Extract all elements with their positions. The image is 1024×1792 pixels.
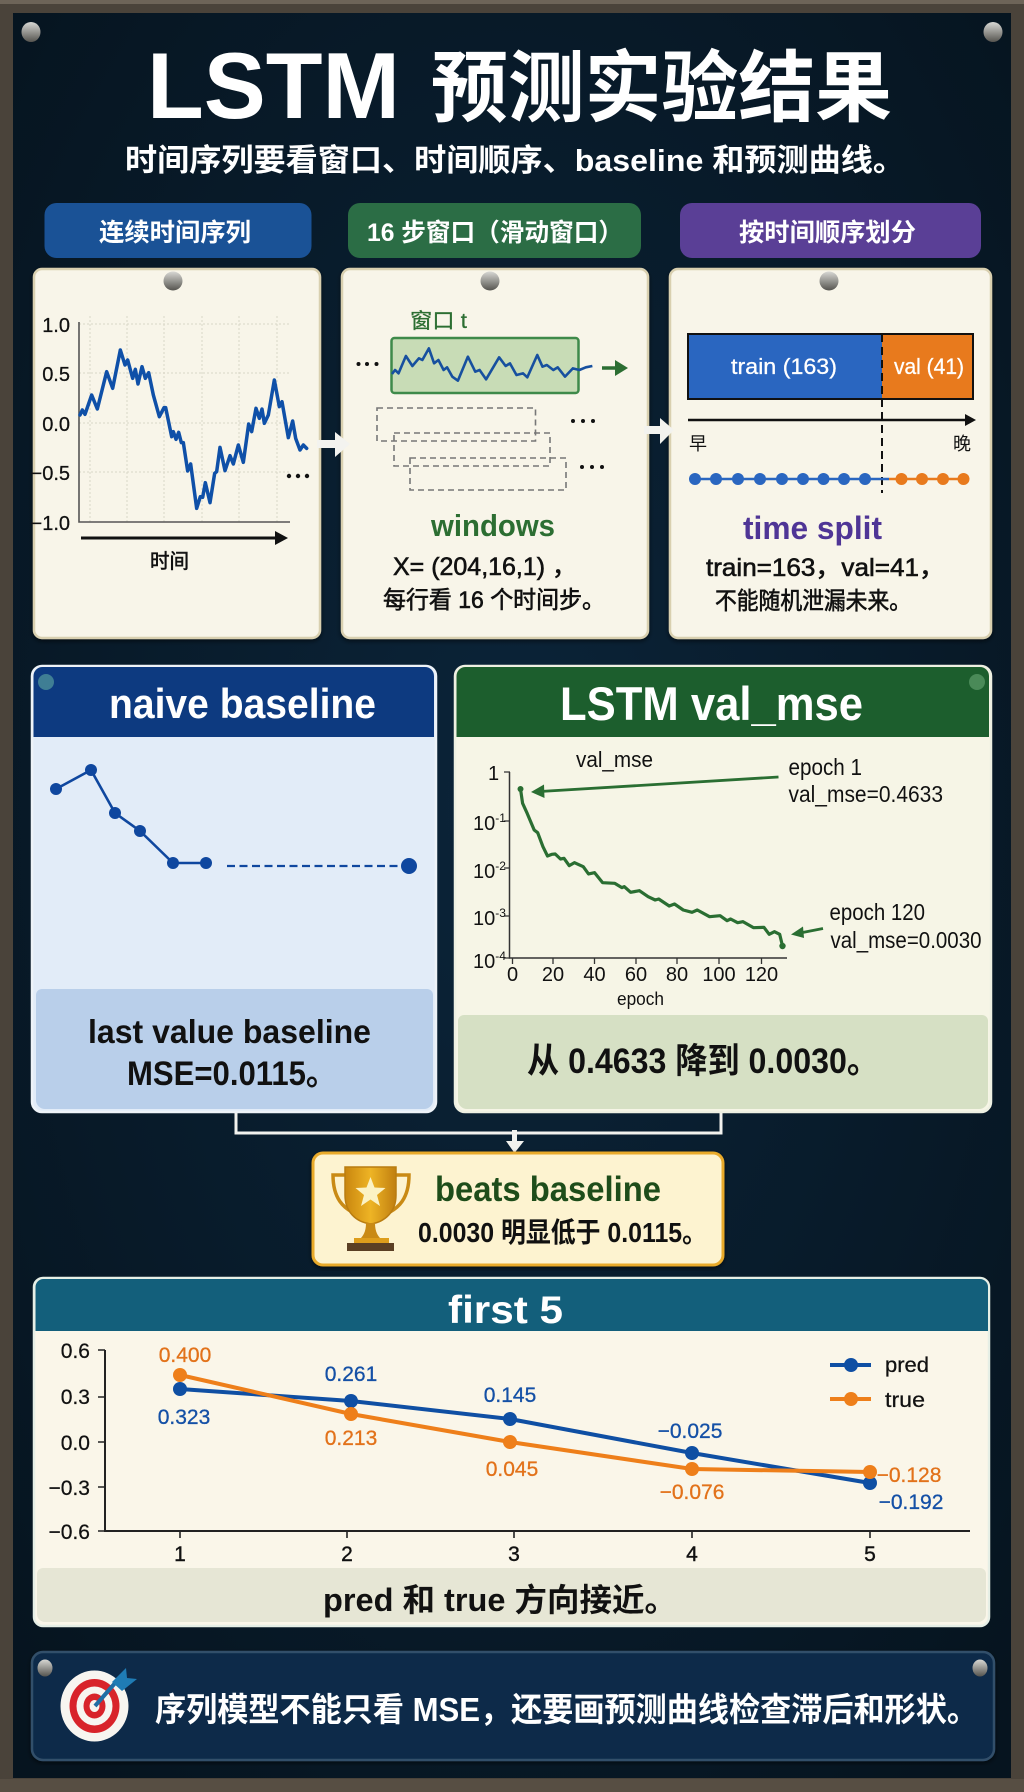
icon: card pin (480, 272, 500, 290)
split bar: train and val: train (163) (731, 354, 837, 379)
subtitle: 时间序列要看窗口、时间顺序、baseline 和预测曲线。 (125, 143, 905, 178)
diagram: last value line (50, 764, 417, 874)
arrow: series to windows (317, 432, 350, 457)
value labels: pred: −0.192 (879, 1491, 943, 1514)
panel: naive baseline (32, 666, 436, 1112)
line chart: time series: 1.0 (42, 315, 70, 337)
line chart: pred vs true: −0.6 (49, 1521, 90, 1544)
arrow: epoch 120 callout (791, 926, 823, 938)
log-scale chart (473, 747, 982, 1009)
title (147, 33, 892, 138)
time axis early to late: 早 (689, 434, 707, 454)
badge: beats baseline (313, 1153, 723, 1265)
value labels: true: 0.213 (325, 1427, 377, 1450)
panel header (34, 667, 434, 737)
icon: card pin (164, 272, 182, 290)
line chart: pred vs true: −0.3 (49, 1477, 90, 1500)
log-scale chart: 120 (745, 964, 778, 986)
line chart: pred vs true: 0.6 (61, 1340, 90, 1363)
step header: 16 step window (348, 203, 641, 258)
value labels: true: −0.128 (877, 1464, 941, 1487)
panel header (456, 667, 989, 737)
heading: first 5: first 5 (448, 1289, 563, 1332)
arrow: epoch 1 callout (531, 777, 778, 798)
legend (830, 1354, 929, 1412)
heading: naive baseline: naive baseline (109, 680, 376, 727)
line chart: time series: 时间 (150, 550, 189, 573)
text: split sizes: train=163，val=41， (706, 554, 945, 582)
line chart: time series: −0.5 (31, 463, 70, 485)
icon: target with dart (60, 1668, 137, 1742)
panel header (36, 1279, 988, 1331)
log-scale chart: 10 (473, 813, 495, 835)
callout: epoch 120 (830, 899, 982, 953)
line chart: pred vs true: 3 (508, 1543, 520, 1566)
value labels: pred: −0.025 (658, 1420, 722, 1443)
value labels: pred: 0.261 (325, 1363, 377, 1386)
icon: trophy (333, 1167, 409, 1251)
text: window shape: 每行看 16 个时间步。 (383, 587, 605, 614)
step header: time order split: 按时间顺序划分 (739, 219, 916, 247)
footer: baseline mse (36, 989, 433, 1109)
icons: banner pins (38, 1660, 988, 1676)
line chart: pred vs true: 0.3 (61, 1386, 90, 1409)
log-scale chart: 10 (473, 861, 495, 883)
line chart: time series (31, 315, 309, 573)
text: window shape (383, 553, 605, 614)
banner: conclusion (32, 1652, 994, 1760)
series: pred (173, 1382, 877, 1490)
heading: windows: windows (430, 508, 555, 543)
log-scale chart: 100 (702, 964, 736, 986)
callout: epoch 1: val_mse=0.4633 (788, 781, 943, 807)
step header: time order split (680, 203, 981, 258)
heading: LSTM val_mse: LSTM val_mse (560, 677, 863, 730)
line chart: pred vs true: 4 (686, 1543, 698, 1566)
value labels: pred: 0.323 (158, 1406, 210, 1429)
panel: time split card (670, 269, 991, 638)
line chart: pred vs true: 5 (864, 1543, 876, 1566)
icon: pin (38, 674, 54, 690)
step header: continuous series: 连续时间序列 (99, 219, 251, 247)
log-scale chart: 60 (625, 964, 647, 986)
text: split sizes (706, 554, 945, 615)
time axis early to late: 晚 (953, 434, 971, 454)
value labels: true: 0.400 (159, 1344, 211, 1367)
footer: direction note (37, 1568, 986, 1622)
log-scale chart: 10 (473, 908, 495, 930)
legend: true (885, 1389, 925, 1412)
log-scale chart: epoch (617, 989, 664, 1009)
line chart: time series: −1.0 (31, 513, 70, 535)
line chart: pred vs true: 1 (174, 1543, 186, 1566)
heading: time split: time split (743, 510, 882, 546)
panel: window card (342, 269, 648, 638)
log-scale chart: val_mse (576, 747, 653, 772)
legend: pred (885, 1354, 929, 1377)
log-scale chart: 40 (583, 964, 606, 986)
callout: epoch 120: epoch 120 (830, 899, 925, 925)
panel: LSTM val_mse (455, 666, 991, 1112)
footer: baseline mse: MSE=0.0115。 (127, 1055, 337, 1093)
line chart: pred vs true: 0.0 (61, 1432, 90, 1455)
text: window shape: X= (204,16,1) ， (393, 553, 577, 581)
log-scale chart: -4 (495, 949, 506, 963)
footer: mse drop (458, 1015, 988, 1109)
icon: pin (969, 674, 985, 690)
line chart: pred vs true (49, 1340, 970, 1566)
panel: time series card (31, 269, 320, 638)
log-scale chart: 1 (488, 763, 499, 785)
line chart: time series: 0.5 (42, 364, 70, 386)
log-scale chart: 20 (542, 964, 564, 986)
value labels: pred: 0.145 (484, 1384, 536, 1407)
log-scale chart: 80 (666, 964, 688, 986)
corner pins (22, 22, 1002, 42)
callout: epoch 120: val_mse=0.0030 (830, 927, 982, 953)
text: comparison: 0.0030 明显低于 0.0115。 (418, 1217, 707, 1248)
split bar: train and val: val (41) (894, 354, 964, 379)
line chart: time series: 0.0 (42, 414, 70, 436)
step header: continuous series (44, 203, 312, 258)
series: true (173, 1368, 877, 1479)
callout: epoch 1 (788, 754, 943, 807)
active window with series (356, 338, 628, 393)
line chart: pred vs true: 2 (341, 1543, 353, 1566)
value labels: true (159, 1344, 941, 1504)
icon: card pin (820, 272, 838, 290)
footer: baseline mse: last value baseline (88, 1013, 371, 1050)
title: 预测实验结果 (431, 44, 892, 132)
time axis early to late (688, 414, 976, 454)
log-scale chart: -3 (495, 906, 506, 920)
connector to badge (236, 1110, 721, 1153)
label: window t: 窗口 t (410, 310, 467, 333)
value labels: true: 0.045 (486, 1458, 538, 1481)
step header: 16 step window: 16 步窗口（滑动窗口） (367, 219, 623, 247)
text: conclusion: 序列模型不能只看 MSE，还要画预测曲线检查滞后和形状。 (155, 1691, 978, 1728)
sliding dashed windows (377, 408, 566, 490)
panel: first 5 (34, 1278, 989, 1626)
footer: mse drop: 从 0.4633 降到 0.0030。 (527, 1042, 879, 1081)
text: split sizes: 不能随机泄漏未来。 (715, 588, 911, 615)
title: LSTM (147, 33, 400, 138)
heading: beats baseline: beats baseline (435, 1170, 661, 1209)
value labels: true: −0.076 (660, 1481, 724, 1504)
log-scale chart: -2 (495, 859, 506, 873)
log-scale chart: 10 (473, 951, 495, 973)
log-scale chart: 0 (507, 964, 518, 986)
arrow: windows to split (644, 418, 674, 444)
split bar: train and val (688, 334, 973, 399)
value labels: pred (158, 1363, 943, 1514)
footer: direction note: pred 和 true 方向接近。 (323, 1582, 677, 1618)
log-scale chart: -1 (495, 811, 506, 825)
timeline dots (689, 473, 970, 485)
callout: epoch 1: epoch 1 (788, 754, 862, 780)
